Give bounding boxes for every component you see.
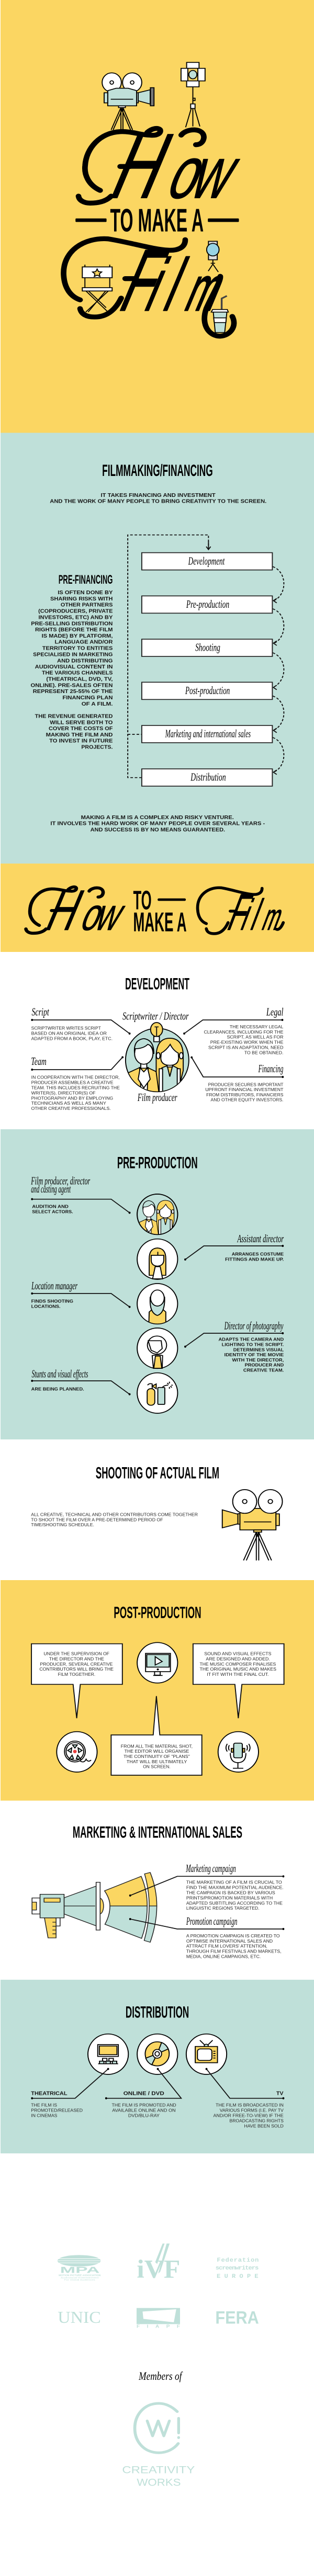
text: pre-financing body: RIGHTS (BEFORE THE FILM — [35, 627, 113, 633]
callout: team: Team — [31, 1055, 47, 1068]
box: marketing and international sales — [142, 725, 272, 743]
label: film producer: Film producer — [137, 1091, 177, 1104]
callout: editor: THE CONTINUITY OF "PLANS" — [124, 1754, 190, 1759]
logo: MPA: Audiovisual Entertainment — [61, 2276, 99, 2279]
callout: tv: BROADCASTING RIGHTS — [230, 2118, 284, 2123]
callout: legal: TO BE OBTAINED. — [244, 1050, 283, 1055]
callout: theatrical: THEATRICAL — [31, 2091, 68, 2096]
text: pre-financing body: IS MADE) BY PLATFORM, — [42, 633, 113, 639]
text: pre-financing body: TERRITORY TO ENTITIES — [42, 645, 113, 651]
logo: FERA: FERA — [215, 2308, 259, 2328]
arrow: dashed revenue loop — [128, 535, 211, 778]
text: shooting body: ALL CREATIVE, TECHNICAL AND OTHER CONTRIBUTORS COME TOGETHER — [31, 1512, 198, 1517]
callout: producer, director and casting agent — [31, 1175, 130, 1214]
callout: online / dvd: AVAILABLE ONLINE AND ON — [112, 2108, 176, 2113]
callout: script: ADAPTED FROM A BOOK, PLAY, ETC. — [31, 1036, 113, 1041]
box: distribution — [142, 769, 272, 786]
callout: sound and effects: ARE DESIGNED AND ADDED. — [206, 1656, 270, 1661]
callout: online / dvd: DVD/BLU-RAY — [128, 2113, 160, 2118]
callout: marketing campaign: ADAPTED SUBTITLING ACCORDING TO THE — [186, 1901, 283, 1905]
text: pre-financing body: THE VARIOUS CHANNELS — [42, 670, 113, 676]
panel: development: DEVELOPMENT — [125, 975, 189, 993]
title: Film small: F — [221, 884, 259, 941]
box: shooting — [142, 639, 272, 656]
icon: microphone — [218, 1732, 259, 1772]
text: pre-financing body: FINANCING PLAN — [62, 695, 113, 701]
callout: marketing campaign: Marketing campaign — [186, 1862, 236, 1875]
callout: team: IN COOPERATION WITH THE DIRECTOR, — [31, 1075, 120, 1080]
text: pre-financing body: SHARING RISKS WITH — [50, 596, 113, 602]
callout: financing: FROM DISTRIBUTORS, FINANCIERS — [206, 1093, 283, 1097]
panel: pre-production — [1, 1129, 314, 1439]
panel: hero title — [1, 0, 314, 433]
callout: producer, director and casting agent: and casting agent — [31, 1183, 71, 1195]
callout: theatrical: PROMOTED/RELEASED — [31, 2108, 83, 2113]
title: to make a small: TO — [133, 886, 152, 915]
callout: theatrical — [31, 2068, 109, 2118]
box: shooting: Shooting — [195, 641, 220, 653]
callout: director of photography: ADAPTS THE CAMERA AND — [218, 1337, 284, 1342]
callout: tv: VARIOUS FORMS (I.E. PAY TV — [220, 2108, 284, 2113]
logo: MPA: MOTION PICTURE ASSOCIATION — [59, 2274, 101, 2277]
callout: assistant director: ARRANGES COSTUME — [232, 1252, 284, 1257]
icon: small lamp — [207, 241, 219, 272]
logo: UNIC: UNIC — [58, 2309, 101, 2327]
title: How small: ow — [74, 889, 132, 940]
title: to make a: TO MAKE A — [110, 203, 204, 239]
callout: director of photography: DETERMINES VISUAL — [233, 1347, 284, 1352]
panel: distribution — [1, 1980, 314, 2153]
label: scriptwriter / director: Scriptwriter / Director — [122, 1010, 189, 1022]
box: pre-production: Pre-production — [186, 598, 229, 610]
text: intro: IT TAKES FINANCING AND INVESTMENT — [100, 493, 216, 498]
callout: legal: PRE-EXISTING WORK WHEN THE — [210, 1040, 283, 1045]
icon: assistant director — [137, 1239, 177, 1279]
box: pre-production — [142, 596, 272, 613]
callout: assistant director — [184, 1232, 284, 1262]
icon: television — [186, 2034, 227, 2074]
text: closing statement: MAKING A FILM IS A COMPLEX AND RISKY VENTURE. — [81, 815, 234, 821]
callout: team: OTHER CREATIVE PROFESSIONALS. — [31, 1106, 111, 1111]
callout: script: SCRIPTWRITER WRITES SCRIPT — [31, 1026, 101, 1031]
callout: legal: CLEARANCES, INCLUDING FOR THE — [204, 1030, 283, 1035]
title: Film: il — [136, 243, 207, 326]
box: development: Development — [188, 555, 225, 567]
logo: federation of screenwriters europe: EUROPE — [217, 2274, 259, 2280]
text: pre-financing body: TO INVEST IN FUTURE — [49, 738, 113, 744]
panel: post-production: POST-PRODUCTION — [114, 1603, 201, 1622]
text: intro — [50, 493, 266, 504]
callout: director of photography: CREATIVE TEAM. — [243, 1368, 284, 1373]
callout: promotion campaign: THROUGH FILM FESTIVALS AND MARKETS, — [186, 1949, 282, 1954]
callout: tv: THE FILM IS BROADCASTED IN — [216, 2103, 284, 2108]
text: shooting body — [31, 1512, 198, 1527]
callout: promotion campaign: A PROMOTION CAMPAIGN IS CREATED TO — [186, 1934, 280, 1938]
icon: location manager — [137, 1284, 177, 1325]
callout: legal: SCRIPT IS AN ADAPTATION, NEED — [208, 1045, 284, 1050]
panel: member logos — [58, 2243, 259, 2383]
logo: FIAPF: FIAPF — [137, 2324, 180, 2329]
logo: FIAPF — [137, 2308, 180, 2329]
callout: producer, director and casting agent: Film producer, director — [31, 1175, 90, 1187]
callout: producer, director and casting agent: AUDITION AND — [32, 1204, 69, 1209]
arrows: stage to stage — [273, 566, 284, 775]
text: pre-financing body: PRE-SELLING DISTRIBUTION — [31, 621, 113, 627]
title: to make a — [75, 203, 239, 239]
callout: assistant director: FITTINGS AND MAKE UP. — [225, 1257, 284, 1262]
icon: film reel — [57, 1732, 97, 1772]
text: pre-financing body: IS OFTEN DONE BY — [58, 590, 113, 596]
text: pre-financing body: REPRESENT 25-55% OF THE — [33, 689, 113, 695]
logo: creativity works — [122, 2403, 195, 2488]
panel: title banner: MAKE A — [133, 907, 187, 937]
callout: online / dvd: ONLINE / DVD — [124, 2091, 164, 2096]
box: development — [142, 553, 272, 570]
text: pre-financing body: (THEATRICAL, DVD, TV, — [46, 676, 113, 682]
callout: stunts and visual effects: Stunts and visual effects — [31, 1368, 88, 1380]
panel: filmmaking and financing: PRE-FINANCING — [59, 572, 113, 587]
callout: stunts and visual effects — [31, 1368, 130, 1395]
callout: director of photography: WITH THE DIRECTOR, — [232, 1358, 284, 1363]
icon: editing monitor — [137, 1642, 177, 1683]
callout: team — [31, 1055, 124, 1111]
callout: marketing campaign: THE CAMPAIGN IS BACKED BY VARIOUS — [186, 1890, 275, 1895]
panel: title banner — [1, 864, 314, 952]
callout: sound and effects: THE MUSIC COMPOSER FINALISES — [200, 1662, 276, 1666]
callout: sound and effects: IT FIT WITH THE FINAL CUT. — [207, 1672, 269, 1677]
callout: team: PHOTOGRAPHY AND BY EMPLOYING — [31, 1096, 113, 1100]
logo: MPA: MPA — [60, 2265, 100, 2275]
panel: shooting of actual film — [1, 1439, 314, 1580]
logo: IVF — [137, 2243, 180, 2283]
text: shooting body: TO SHOOT THE FILM OVER A PRE-DETERMINED PERIOD OF — [31, 1517, 163, 1522]
callout: legal — [183, 1006, 284, 1055]
text: closing statement: IT INVOLVES THE HARD WORK OF MANY PEOPLE OVER SEVERAL YEARS - — [50, 821, 265, 826]
callout: financing: PRODUCER SECURES IMPORTANT — [208, 1082, 284, 1087]
icon: casting pair — [137, 1194, 177, 1236]
callout: promotion campaign: Promotion campaign — [186, 1915, 237, 1927]
text: pre-financing body: AUDIOVISUAL CONTENT IN — [35, 664, 113, 670]
title: Film small — [198, 884, 294, 941]
logo: MPA: For Global Audiences — [64, 2278, 95, 2281]
callout: team: WRITER(S), DIRECTOR(S) OF — [31, 1091, 96, 1095]
title: Film — [64, 231, 245, 336]
callout: online / dvd: THE FILM IS PROMOTED AND — [112, 2103, 176, 2108]
callout: legal: THE NECESSARY LEGAL — [230, 1025, 283, 1029]
panel: distribution: DISTRIBUTION — [126, 2003, 189, 2022]
text: pre-financing body: COVER THE COSTS OF — [49, 726, 113, 732]
title: How — [78, 115, 259, 218]
title: How: H — [98, 115, 187, 218]
callout: location manager — [31, 1279, 130, 1309]
box: post-production: Post-production — [185, 684, 230, 697]
text: shooting body: TIME/SHOOTING SCHEDULE. — [31, 1523, 94, 1527]
callout: supervision — [31, 1644, 122, 1718]
panel: development: Financing — [258, 1062, 283, 1075]
icon: megaphone — [32, 1873, 157, 1942]
callout: editor: THE EDITOR WILL ORGANISE — [125, 1749, 189, 1754]
callout: financing — [190, 1057, 284, 1103]
callout: editor — [111, 1696, 202, 1775]
label: members of: Members of — [138, 2369, 183, 2383]
title: How small — [26, 879, 137, 943]
icon: disc — [137, 2034, 177, 2074]
logo: federation of screenwriters europe: Federation — [217, 2257, 259, 2264]
callout: director of photography — [184, 1320, 284, 1373]
callout: editor: ON SCREEN. — [143, 1764, 171, 1769]
callout: online / dvd — [105, 2068, 181, 2118]
callout: tv: AND/OR FREE-TO-VIEW) IF THE — [214, 2113, 284, 2118]
callout: legal: Legal — [266, 1006, 283, 1018]
callout: marketing campaign: FIND THE MAXIMUM POTENTIAL AUDIENCE. — [186, 1885, 284, 1890]
icon: cinema — [88, 2034, 128, 2074]
callout: script — [31, 1006, 130, 1041]
title: How: ow — [158, 132, 252, 213]
callout: team: PRODUCER ASSEMBLES A CREATIVE — [31, 1080, 114, 1085]
callout: marketing campaign: PRINTS/PROMOTION MATERIALS WITH — [186, 1896, 273, 1900]
text: pre-financing body: AND DISTRIBUTING — [57, 658, 113, 664]
callout: promotion campaign: ATTRACT FILM LOVERS' ATTENTION, — [186, 1944, 267, 1949]
callout: editor: THAT WILL BE ULTIMATELY — [127, 1760, 187, 1764]
callout: supervision: THE DIRECTOR AND THE — [49, 1656, 104, 1661]
callout: script: BASED ON AN ORIGINAL IDEA OR — [31, 1031, 107, 1036]
callout: marketing campaign: THE MARKETING OF A FILM IS CRUCIAL TO — [186, 1880, 282, 1885]
callout: location manager: Location manager — [31, 1279, 77, 1292]
callout: marketing campaign: LINGUISTIC REGIONS TARGETED. — [186, 1906, 260, 1911]
panel: marketing and international sales — [1, 1801, 314, 1980]
illustration: two people with lightbulb — [126, 1023, 189, 1095]
text: pre-financing body — [31, 590, 113, 750]
callout: promotion campaign — [129, 1915, 284, 1959]
text: pre-financing body: (COPRODUCERS, PRIVATE — [38, 608, 113, 614]
logo: MPA — [58, 2255, 101, 2281]
icon: director of photography — [137, 1328, 177, 1368]
callout: promotion campaign: OPTIMISE INTERNATIONAL SALES AND — [186, 1939, 273, 1944]
icon: film camera on tripod — [102, 73, 154, 130]
callout: supervision: FILM TOGETHER. — [58, 1672, 95, 1677]
callout: financing: AND OTHER EQUITY INVESTORS. — [211, 1097, 283, 1103]
text: closing statement: AND SUCCESS IS BY NO MEANS GUARANTEED. — [91, 827, 225, 833]
box: distribution: Distribution — [190, 771, 226, 783]
box: post-production — [142, 682, 272, 699]
text: intro: AND THE WORK OF MANY PEOPLE TO BRING CREATIVITY TO THE SCREEN. — [50, 498, 266, 504]
text: pre-financing body: INVESTORS, ETC) AND BY — [38, 615, 113, 620]
icon: yellow film camera — [222, 1490, 283, 1560]
text: pre-financing body: WILL SERVE BOTH TO — [50, 720, 113, 725]
logo: creativity works: WORKS — [137, 2477, 181, 2488]
icon: stunts and effects — [137, 1373, 177, 1413]
title: Film: m — [176, 254, 236, 324]
callout: supervision: UNDER THE SUPERVISION OF — [43, 1651, 109, 1656]
callout: tv: HAVE BEEN SOLD — [244, 2124, 284, 2128]
callout: tv — [206, 2068, 284, 2128]
title: Film: F — [108, 231, 180, 329]
callout: tv: TV — [276, 2091, 284, 2096]
callout: sound and effects — [193, 1644, 284, 1718]
logo: federation of screenwriters europe: screenwriters — [216, 2265, 259, 2272]
text: closing statement — [50, 815, 265, 833]
title: Film small: il — [236, 891, 274, 939]
callout: legal: SCRIPT, AS WELL AS FOR — [227, 1035, 284, 1040]
logo: creativity works: CREATIVITY — [122, 2465, 195, 2476]
callout: marketing campaign — [129, 1862, 284, 1911]
callout: financing: UPFRONT FINANCIAL INVESTMENT — [205, 1087, 284, 1092]
callout: theatrical: THE FILM IS — [31, 2103, 57, 2108]
callout: director of photography: IDENTITY OF THE MOVIE — [225, 1353, 284, 1357]
callout: promotion campaign: MEDIA, ONLINE CAMPAIGNS, ETC. — [186, 1954, 261, 1959]
text: pre-financing body: SPECIALISED IN MARKETING — [33, 652, 113, 657]
logo: federation of screenwriters europe — [216, 2257, 259, 2280]
text: pre-financing body: MAKING THE FILM AND — [46, 732, 113, 738]
callout: location manager: LOCATIONS. — [31, 1304, 61, 1309]
callout: theatrical: IN CINEMAS — [31, 2113, 57, 2118]
text: pre-financing body: THE REVENUE GENERATED — [35, 713, 113, 719]
callout: script: Script — [31, 1006, 49, 1018]
callout: director of photography: LIGHTING TO THE SCRIPT. — [222, 1342, 284, 1347]
text: pre-financing body: PROJECTS. — [81, 744, 113, 750]
callout: team: TEAM. THIS INCLUDES RECRUITING THE — [31, 1085, 120, 1090]
callout: location manager: FINDS SHOOTING — [31, 1299, 73, 1304]
panel: filmmaking and financing — [1, 433, 314, 864]
callout: sound and effects: THE ORIGINAL MUSIC AND MAKES — [200, 1667, 276, 1672]
panel: pre-production: PRE-PRODUCTION — [117, 1153, 198, 1172]
text: pre-financing body: OF A FILM. — [82, 701, 113, 707]
text: pre-financing body: OTHER PARTNERS — [61, 602, 113, 608]
title: How small: H — [38, 879, 93, 943]
callout: supervision: PRODUCER, SEVERAL CREATIVE — [40, 1662, 113, 1666]
icon: studio lamp — [181, 62, 205, 127]
title: to make a small — [133, 886, 187, 937]
panel: post-production — [1, 1580, 314, 1801]
logo: IVF: iVF — [137, 2254, 180, 2283]
callout: team: TECHNICIANS AS WELL AS MANY — [31, 1101, 106, 1106]
callout: editor: FROM ALL THE MATERIAL SHOT, — [121, 1744, 193, 1749]
callout: stunts and visual effects: ARE BEING PLANNED. — [31, 1387, 84, 1392]
text: pre-financing body: LANGUAGE AND/OR — [54, 639, 113, 645]
title: Film small: m — [257, 896, 289, 938]
panel: development — [1, 952, 314, 1129]
callout: sound and effects: SOUND AND VISUAL EFFECTS — [204, 1651, 271, 1656]
text: pre-financing body: ONLINE). PRE-SALES OFTEN — [31, 683, 113, 688]
callout: producer, director and casting agent: SELECT ACTORS. — [32, 1209, 73, 1214]
callout: director of photography: PRODUCER AND — [245, 1363, 284, 1368]
callout: supervision: CONTRIBUTORS WILL BRING THE — [39, 1667, 114, 1672]
icon: drink cup — [211, 296, 228, 333]
icon: director chair — [82, 265, 112, 312]
